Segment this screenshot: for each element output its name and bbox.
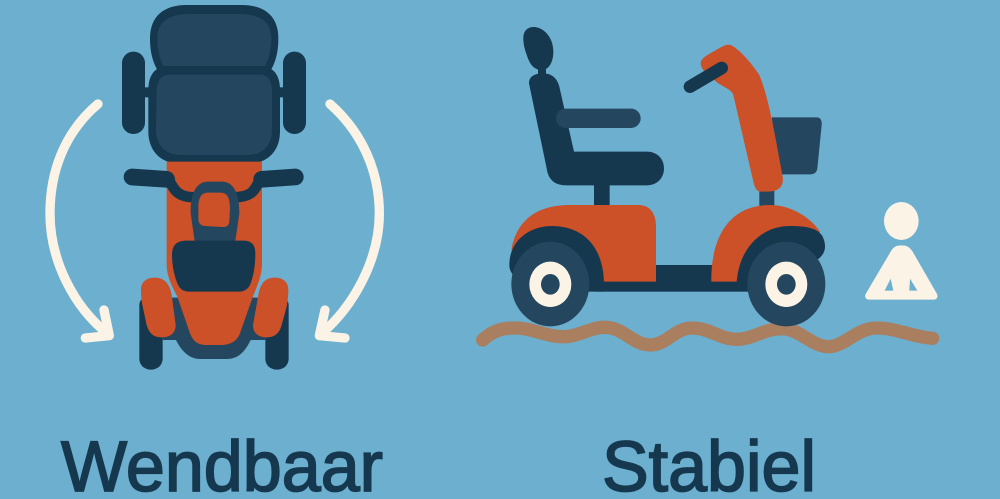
icon: person sitting xyxy=(865,202,937,300)
arrow: left curved arrow xyxy=(50,104,109,338)
icon: rear wheel xyxy=(511,242,589,326)
icon: bumpy ground xyxy=(483,327,933,347)
panel: wendbaar scooter top view with arrows xyxy=(50,5,379,370)
icon: scooter seen from above xyxy=(122,5,306,370)
icon: scooter seen from the side xyxy=(509,27,825,326)
arrow: right curved arrow xyxy=(319,104,379,338)
icon: front wheel xyxy=(747,242,825,326)
panel: stabiel scooter side view xyxy=(483,27,937,347)
